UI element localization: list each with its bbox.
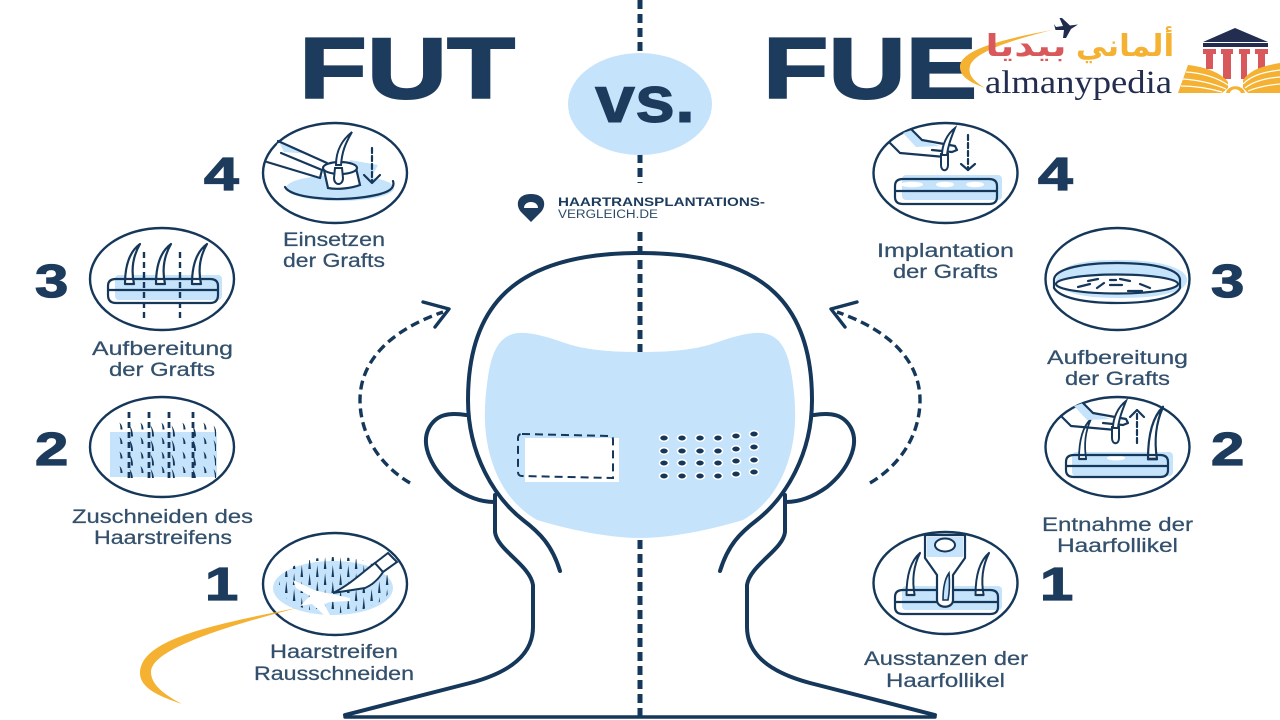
label: Entnahme der — [1042, 515, 1194, 536]
vs badge — [568, 53, 712, 155]
label: Implantation — [877, 241, 1014, 262]
label: Zuschneiden des — [72, 507, 253, 528]
icon: petri dish — [1046, 228, 1190, 330]
label: der Grafts — [893, 262, 998, 283]
brand mark: Haartransplantations-Vergleich: VERGLEICH.DE — [558, 209, 658, 221]
label: der Grafts — [283, 251, 385, 272]
FUT donor strip — [518, 434, 619, 482]
swoosh and plane — [960, 18, 1078, 88]
arrow: FUT dashed arc — [360, 302, 449, 483]
FUE step 4 — [874, 123, 1073, 283]
FUE step 4: 4 — [1038, 148, 1073, 200]
FUE step 1 — [864, 532, 1073, 692]
label — [72, 507, 253, 549]
icon: inserting graft — [263, 123, 407, 223]
center dashed divider — [638, 0, 642, 716]
label: Aufbereitung — [1047, 348, 1188, 369]
title: FUT: FUT — [299, 21, 515, 117]
label — [283, 230, 385, 272]
label: Haarstreifen — [270, 642, 398, 663]
label — [254, 642, 414, 685]
FUT step 2 — [35, 397, 253, 549]
tweezers and graft — [1061, 401, 1128, 443]
label: Rausschneiden — [254, 664, 414, 685]
icon: implanting graft — [874, 123, 1018, 223]
title: FUE: FUE — [763, 21, 977, 117]
brand mark: Haartransplantations-Vergleich: HAARTRANSPLANTATIONS- — [558, 197, 765, 209]
label: Haarfollikel — [1057, 536, 1178, 557]
FUT step 4 — [204, 123, 407, 272]
arrow: FUE dashed arc — [831, 302, 920, 483]
icon: graft strip sections — [90, 228, 234, 330]
vs badge: vs. — [595, 62, 695, 136]
label: der Grafts — [109, 360, 215, 381]
head illustration — [345, 253, 935, 717]
label — [1042, 515, 1194, 557]
FUT step 3: 3 — [35, 256, 68, 307]
FUT step 3 — [35, 228, 234, 381]
icon: book and temple — [1178, 28, 1280, 93]
label: Haarstreifens — [94, 528, 232, 549]
label: Einsetzen — [283, 230, 385, 251]
tweezers and graft — [890, 128, 957, 170]
watermark swoosh with plane — [140, 580, 350, 704]
head outline — [345, 253, 935, 717]
label: Haarfollikel — [886, 671, 1005, 692]
FUT step 1: 1 — [205, 559, 238, 610]
label — [877, 241, 1014, 283]
logo: almanypedia — [960, 18, 1280, 101]
FUT step 1 — [205, 533, 414, 685]
label: der Grafts — [1065, 369, 1170, 390]
label: Aufbereitung — [92, 339, 233, 360]
FUE step 1: 1 — [1040, 559, 1073, 610]
FUE step 2: 2 — [1211, 424, 1244, 475]
icon: scalpel cutting strip — [263, 533, 407, 635]
icon: cutting hair strip — [90, 397, 234, 497]
icon: follicle removal — [1046, 397, 1190, 497]
label — [92, 339, 233, 381]
FUE step 3 — [1046, 228, 1244, 390]
label — [864, 649, 1029, 692]
latin wordmark: almanypedia — [985, 65, 1172, 101]
label: Ausstanzen der — [864, 649, 1029, 670]
FUE step 3: 3 — [1211, 256, 1244, 307]
arabic wordmark: ألماني — [1076, 27, 1174, 64]
FUE step 2 — [1042, 397, 1244, 557]
icon: punch tool — [874, 532, 1018, 634]
FUT step 2: 2 — [35, 424, 68, 475]
scalp blue area — [485, 333, 795, 538]
FUT step 4: 4 — [204, 148, 239, 200]
logo: almanypedia: بيديا — [985, 29, 1067, 64]
brand mark: Haartransplantations-Vergleich — [518, 194, 765, 222]
label — [1047, 348, 1188, 390]
FUE extraction dots — [660, 431, 758, 479]
